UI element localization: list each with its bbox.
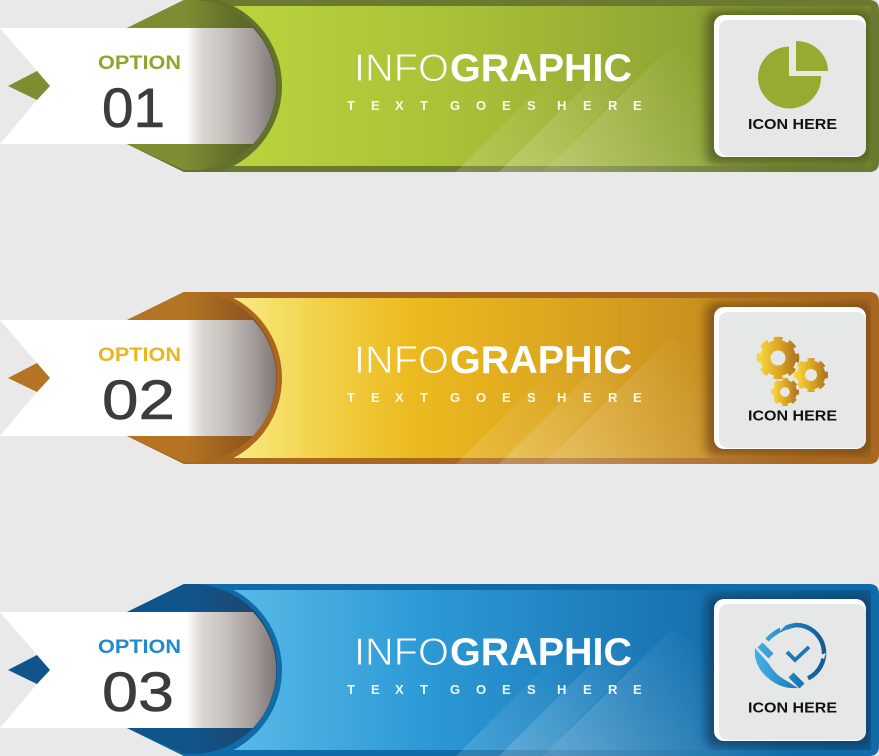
subtitle: TEXT [347,98,428,113]
subtitle: HERE [557,390,642,405]
icon caption: ICON HERE [748,408,837,424]
subtitle: GOES [450,682,536,697]
title: GRAPHIC [450,339,632,382]
option label: OPTION [98,636,181,658]
icon card [714,15,866,157]
icon: phone with clock and check [755,622,826,688]
white ribbon [0,28,276,144]
banner frame [127,0,879,172]
option label: OPTION [98,52,181,74]
subtitle: GOES [450,98,536,113]
option number: 03 [102,660,174,723]
light stripes [456,636,762,756]
icon caption: ICON HERE [748,700,837,716]
subtitle: HERE [557,98,642,113]
card shadow [706,10,872,164]
icon caption: ICON HERE [748,116,837,133]
main gradient panel [233,6,871,166]
white ribbon [0,612,276,728]
main gradient panel [233,298,871,458]
icon: gears [758,338,826,404]
banner: option 02 [0,288,879,468]
arrow tip [8,363,50,392]
card shadow [706,594,872,748]
subtitle: TEXT [347,682,428,697]
title: INFO [354,631,449,674]
title: GRAPHIC [450,47,632,90]
icon card [714,599,866,741]
main gradient panel [233,590,871,750]
icon: pie chart [758,41,828,108]
card shadow [706,302,872,456]
icon card [714,307,866,449]
title: INFO [354,339,449,382]
arrow tip [8,655,50,684]
banner: option 03 [0,580,879,756]
title: INFO [354,47,449,90]
subtitle: GOES [450,390,536,405]
banner frame [127,584,879,756]
banner: option 01 [0,0,879,176]
light stripes [456,55,756,172]
light stripes [456,346,760,464]
subtitle: HERE [557,682,642,697]
arrow tip [8,71,50,100]
ribbon fold [127,292,282,464]
option number: 01 [102,76,165,139]
option number: 02 [102,368,175,431]
option label: OPTION [98,344,181,366]
ribbon fold [127,0,282,172]
banner frame [127,292,879,464]
title: GRAPHIC [450,631,632,674]
white ribbon [0,320,276,436]
ribbon fold [127,584,282,756]
subtitle: TEXT [347,390,428,405]
